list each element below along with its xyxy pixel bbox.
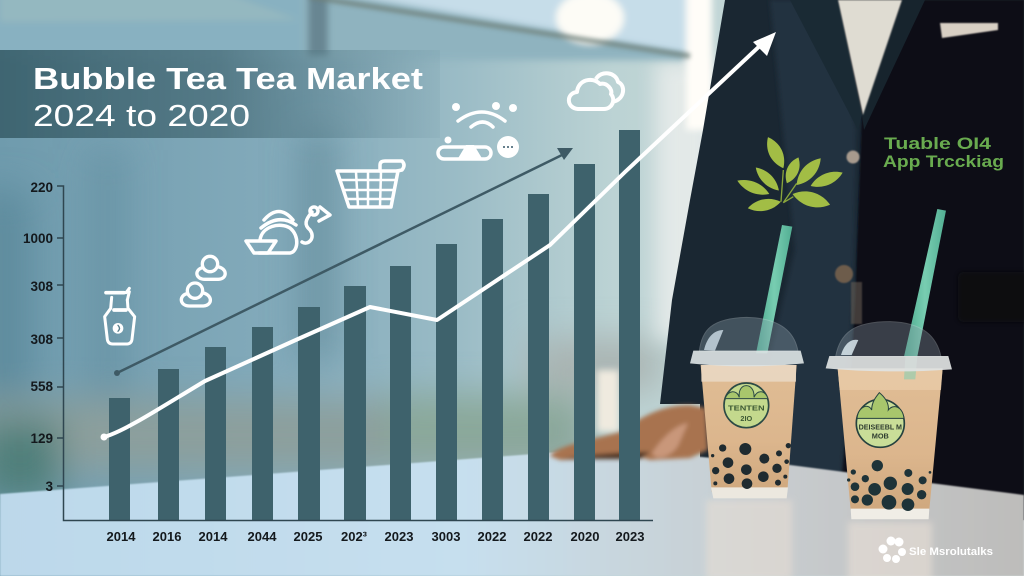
icon: teapot <box>246 207 330 253</box>
x axis labels: 2023 <box>385 529 413 544</box>
table surface <box>0 452 1024 576</box>
y axis labels: 220 <box>30 180 53 195</box>
icon: green tea leaves <box>735 134 845 214</box>
brand watermark: Sle Msrolutalks <box>909 546 993 558</box>
bubble tea cup: right <box>826 209 952 519</box>
banner: title: 2024 to 2020 <box>33 98 250 133</box>
lid rim <box>690 351 804 366</box>
cup reflections <box>706 500 932 576</box>
y axis labels: 308 <box>30 332 53 347</box>
logo badge: DEISEEBL M <box>859 422 902 431</box>
y axis labels: 558 <box>30 379 53 394</box>
straw <box>904 209 946 357</box>
y axis labels: 308 <box>30 279 53 294</box>
cup body <box>838 368 943 510</box>
x axis labels: 2025 <box>294 529 322 544</box>
pearls <box>711 443 791 489</box>
y axis labels <box>23 180 53 494</box>
x axis labels: 202³ <box>341 529 368 544</box>
x axis labels: 2014 <box>107 529 136 544</box>
x axis labels: 2022 <box>524 529 552 544</box>
pocket square <box>940 23 998 38</box>
x axis labels: 2023 <box>616 529 644 544</box>
x axis labels <box>107 529 644 544</box>
bubble tea cup: left <box>690 225 804 498</box>
x axis labels: 2014 <box>199 529 228 544</box>
icon: cloud <box>569 73 623 109</box>
y axis labels: 3 <box>45 479 53 494</box>
green caption: Tuable OI4 <box>884 134 992 153</box>
person in dark suit <box>660 0 1024 520</box>
icon: shopping basket <box>337 161 404 207</box>
green caption <box>883 134 1004 171</box>
x axis labels: 2044 <box>248 529 277 544</box>
y axis labels: 1000 <box>23 231 53 246</box>
banner: title <box>0 50 440 138</box>
green caption: App Trcckiag <box>883 152 1004 171</box>
x axis labels: 3003 <box>432 529 460 544</box>
brand watermark <box>878 536 993 563</box>
dark trend arrow <box>114 148 573 376</box>
banner: title: Bubble Tea Tea Market <box>33 61 423 96</box>
logo badge: TENTEN <box>728 404 765 413</box>
bar chart <box>23 130 653 544</box>
x axis labels: 2016 <box>153 529 181 544</box>
straw <box>756 225 792 353</box>
dome lid <box>699 317 798 352</box>
lid rim <box>826 356 952 371</box>
logo badge: MOB <box>872 432 889 441</box>
hand resting on table <box>550 405 708 460</box>
icon: bottle <box>105 288 135 344</box>
axes <box>57 186 653 520</box>
cup body <box>701 365 797 492</box>
logo badge <box>724 383 769 428</box>
x axis labels: 2022 <box>478 529 506 544</box>
white growth arrow <box>100 32 776 440</box>
logo badge: 2IO <box>740 414 753 423</box>
y axis labels: 129 <box>30 431 53 446</box>
suit buttons <box>846 150 860 164</box>
dome lid <box>836 322 941 357</box>
bars <box>109 130 640 520</box>
logo mark <box>878 536 906 563</box>
pearls <box>847 460 931 511</box>
icon: clouds <box>181 256 225 306</box>
x axis labels: 2020 <box>571 529 599 544</box>
icon: wifi and tray <box>438 102 519 160</box>
logo badge <box>856 393 904 447</box>
